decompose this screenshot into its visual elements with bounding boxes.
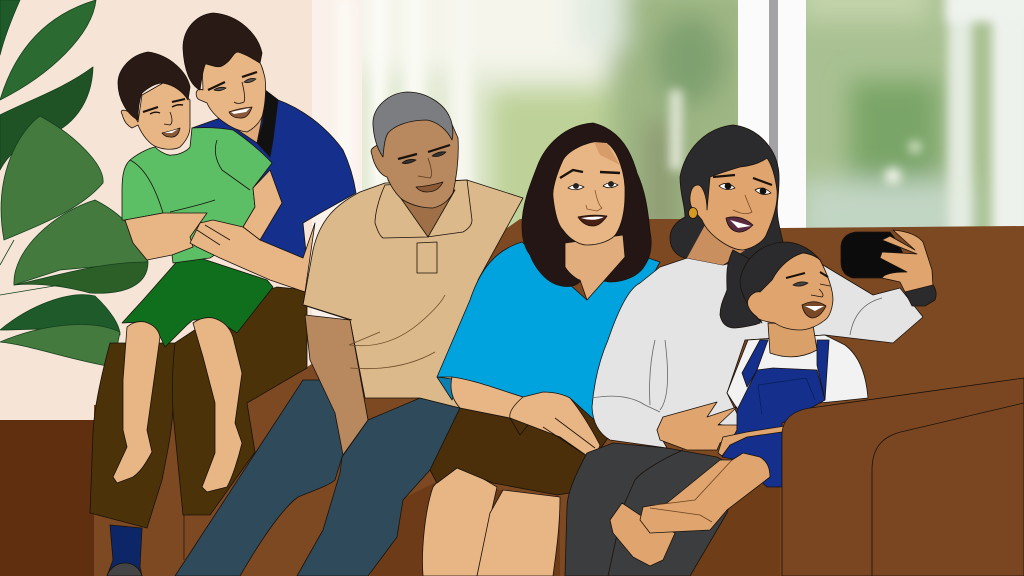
- window frame: [738, 0, 806, 240]
- head: grandfather: [371, 92, 472, 273]
- boy in green shirt: [113, 52, 315, 492]
- toddler in overalls: [610, 242, 868, 566]
- icon: phone: [841, 232, 910, 278]
- man in blue polo: [90, 13, 356, 576]
- sofa arm: [782, 378, 1024, 576]
- hand holding phone: [880, 230, 933, 292]
- icon: watch: [905, 285, 936, 306]
- head: grandmother: [522, 123, 651, 300]
- head: man: [183, 13, 266, 143]
- grandmother in blue blouse: [422, 123, 660, 576]
- head: boy: [118, 52, 190, 149]
- mother in grey sweater: [565, 125, 936, 576]
- grandfather in tan polo: [175, 92, 523, 576]
- plant: [0, 0, 148, 367]
- hair: mother: [670, 125, 785, 265]
- left window view: [362, 0, 738, 228]
- sofa: [94, 219, 1024, 576]
- floor: [0, 420, 100, 576]
- sweater: [592, 250, 923, 448]
- right window view: [806, 0, 1024, 228]
- face: mother: [687, 158, 777, 265]
- head: toddler: [720, 242, 833, 357]
